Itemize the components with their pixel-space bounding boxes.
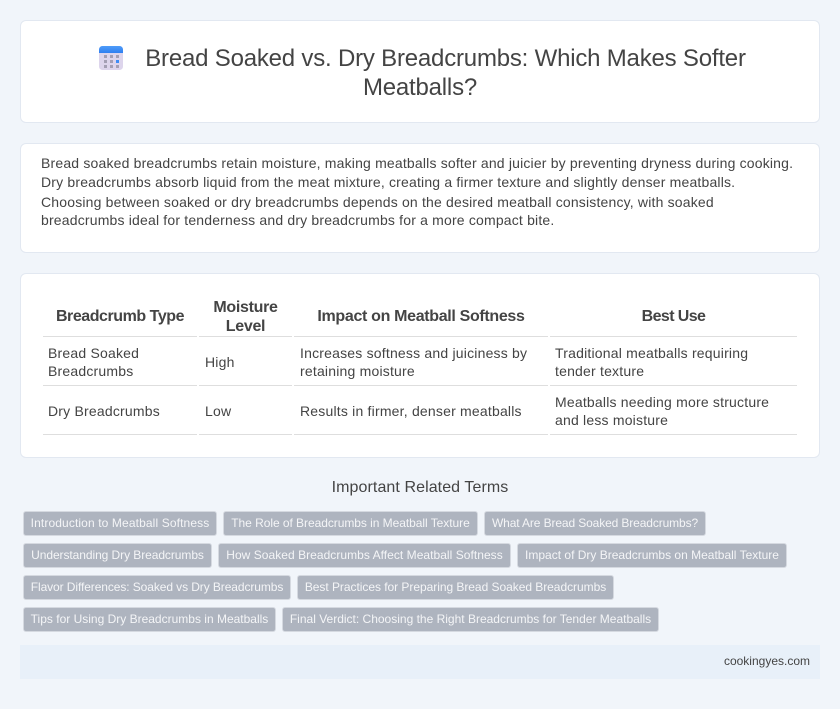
table header: Moisture xyxy=(213,299,278,316)
related term tags: Tips for Using Dry Breadcrumbs in Meatballs xyxy=(31,612,268,626)
table row: bread soaked: High xyxy=(205,354,235,370)
table header xyxy=(56,299,706,335)
related term tags: Introduction to Meatball Softness xyxy=(31,516,209,530)
title: Bread Soaked vs. Dry Breadcrumbs: Which Makes Softer xyxy=(145,45,746,72)
table header: Level xyxy=(226,318,265,335)
title: Meatballs? xyxy=(363,74,477,101)
related term tags: Flavor Differences: Soaked vs Dry Breadcrumbs xyxy=(31,580,283,594)
table header: Breadcrumb Type xyxy=(56,308,184,325)
related term tags: Understanding Dry Breadcrumbs xyxy=(31,548,204,562)
icon: calendar xyxy=(99,46,123,70)
related term tags: Impact of Dry Breadcrumbs on Meatball Texture xyxy=(525,548,779,562)
table row: dry breadcrumbs xyxy=(48,394,769,428)
table row: dry breadcrumbs: Results in firmer, denser meatballs xyxy=(300,403,522,419)
title xyxy=(145,45,746,101)
table row: bread soaked: Traditional meatballs requiring xyxy=(555,345,748,361)
intro text: Bread soaked breadcrumbs retain moisture, making meatballs softer and juicier by preventing dryness during cooking. xyxy=(41,155,793,171)
table row: bread soaked xyxy=(48,345,748,379)
table row: bread soaked: Bread Soaked xyxy=(48,345,139,361)
table row: bread soaked: Increases softness and juiciness by xyxy=(300,345,527,361)
related term tags: Final Verdict: Choosing the Right Breadcrumbs for Tender Meatballs xyxy=(290,612,651,626)
related term tags: Best Practices for Preparing Bread Soaked Breadcrumbs xyxy=(305,580,606,594)
related term tags: The Role of Breadcrumbs in Meatball Texture xyxy=(231,516,470,530)
related term tags: How Soaked Breadcrumbs Affect Meatball Softness xyxy=(226,548,503,562)
table row: dry breadcrumbs: Low xyxy=(205,403,231,419)
intro text: breadcrumbs ideal for tenderness and dry breadcrumbs for a more compact bite. xyxy=(41,212,554,228)
related term tags: What Are Bread Soaked Breadcrumbs? xyxy=(492,516,698,530)
table row: bread soaked: tender texture xyxy=(555,363,644,379)
related term tags xyxy=(23,511,787,632)
table row: dry breadcrumbs: Meatballs needing more structure xyxy=(555,394,769,410)
footer xyxy=(20,645,820,679)
heading: related terms: Important Related Terms xyxy=(332,479,508,496)
footer source: cookingyes.com xyxy=(724,654,810,668)
panel: header xyxy=(20,20,820,123)
panel: introduction xyxy=(20,143,820,253)
table row: dry breadcrumbs: Dry Breadcrumbs xyxy=(48,403,160,419)
panel: comparison table xyxy=(20,273,820,458)
table row: bread soaked: retaining moisture xyxy=(300,363,415,379)
intro text: Choosing between soaked or dry breadcrumbs depends on the desired meatball consistency, with soaked xyxy=(41,194,714,210)
table header: Impact on Meatball Softness xyxy=(317,308,525,325)
intro text: Dry breadcrumbs absorb liquid from the meat mixture, creating a firmer texture and slightly denser meatballs. xyxy=(41,174,735,190)
intro text xyxy=(41,155,793,228)
table row: bread soaked: Breadcrumbs xyxy=(48,363,133,379)
table header: Best Use xyxy=(642,308,705,325)
table row: dry breadcrumbs: and less moisture xyxy=(555,412,668,428)
